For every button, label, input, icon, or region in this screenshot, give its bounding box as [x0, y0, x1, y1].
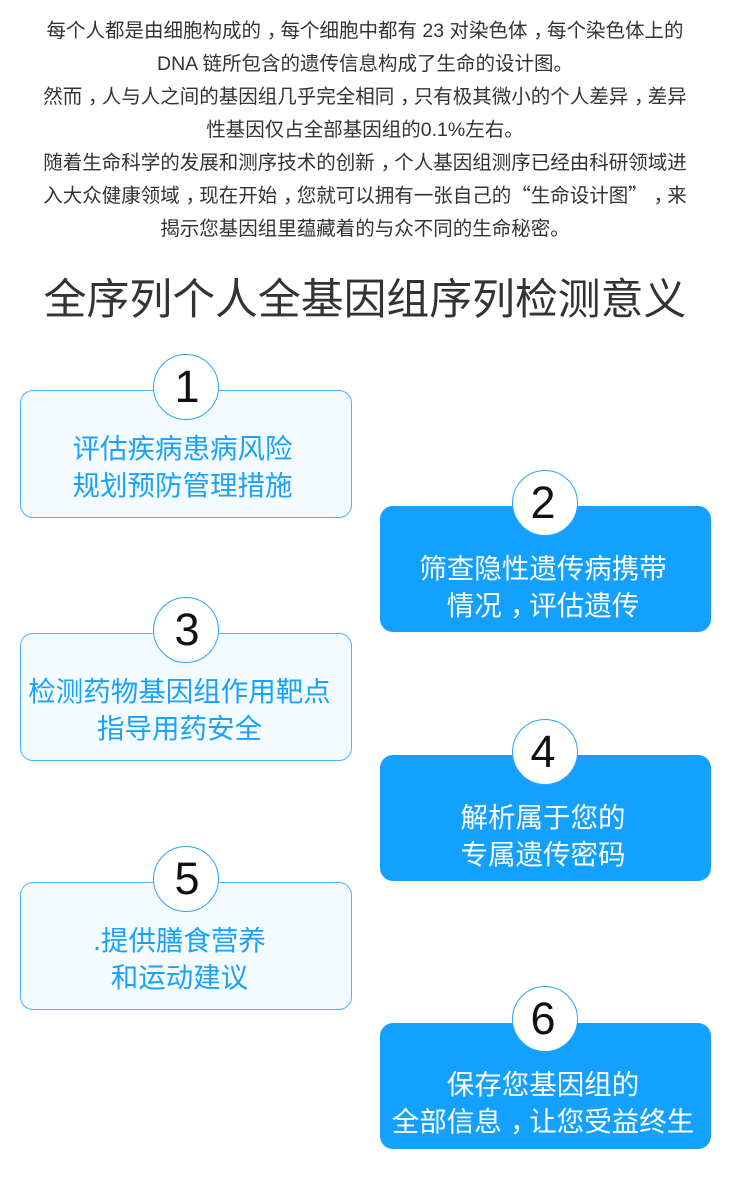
panel 3 text line 2: 指导用药安全 [97, 712, 262, 744]
number badge 5 [153, 846, 219, 912]
intro line 6: 入大众健康领域 ，现在开始 ，您就可以拥有一张自己的 生命设计图 ，来 [43, 184, 687, 206]
intro line 6: ” [628, 178, 648, 208]
panel 3 text line 1: 检测药物基因组作用靶点 [28, 676, 331, 706]
panel 3: drug targets [20, 632, 352, 760]
panel 5: diet and exercise [20, 882, 352, 1010]
intro line 5: 随着生命科学的发展和测序技术的创新 ，个人基因组测序已经由科研领域进 [43, 152, 687, 174]
panel 5 text line 1: .提供膳食营养 [93, 924, 266, 956]
number badge 4 [512, 719, 578, 785]
intro line 1: 每个人都是由细胞构成的 ，每个细胞中都有 23 对染色体 ，每个染色体上的 [46, 20, 684, 42]
number badge 3 [153, 597, 219, 663]
number badge 1 [153, 354, 219, 420]
intro line 2: DNA 链所包含的遗传信息构成了生命的设计图。 [157, 52, 573, 74]
number badge 4: 4 [530, 726, 556, 777]
number badge 2 [512, 470, 578, 536]
panel 1 text line 2: 规划预防管理措施 [72, 470, 292, 500]
number badge 6: 6 [530, 993, 556, 1044]
intro line 4: 性基因仅占全部基因组的0.1%左右。 [206, 118, 524, 140]
intro text block [43, 20, 687, 240]
number badge 5: 5 [174, 853, 200, 904]
panel 4: genetic code [380, 755, 710, 881]
intro line 6: “ [511, 178, 531, 208]
panel 1 text line 1: 评估疾病患病风险 [72, 432, 292, 464]
panel 5 text line 2: 和运动建议 [111, 962, 248, 992]
panel 4 text line 1: 解析属于您的 [460, 802, 626, 833]
panel 6: lifelong benefit [380, 1023, 710, 1149]
panel 1: disease risk [20, 390, 352, 518]
main heading: 全序列个人全基因组序列检测意义 [44, 276, 686, 324]
panel 6 text line 1: 保存您基因组的 [447, 1069, 639, 1100]
panel 2 text line 1: 筛查隐性遗传病携带 [419, 553, 667, 584]
number badge 6 [512, 986, 578, 1052]
panel 2: carrier screening [380, 506, 710, 632]
number badge 3: 3 [174, 604, 200, 655]
intro line 3: 然而 ，人与人之间的基因组几乎完全相同 ，只有极其微小的个人差异 ，差异 [43, 86, 687, 108]
number badge 2: 2 [530, 477, 556, 528]
panel 2 text line 2: 情况 ，评估遗传 [447, 590, 639, 621]
panel 4 text line 2: 专属遗传密码 [460, 839, 626, 870]
number badge 1: 1 [174, 361, 200, 412]
intro line 7: 揭示您基因组里蕴藏着的与众不同的生命秘密。 [160, 218, 570, 240]
panel 6 text line 2: 全部信息 ，让您受益终生 [392, 1106, 694, 1137]
